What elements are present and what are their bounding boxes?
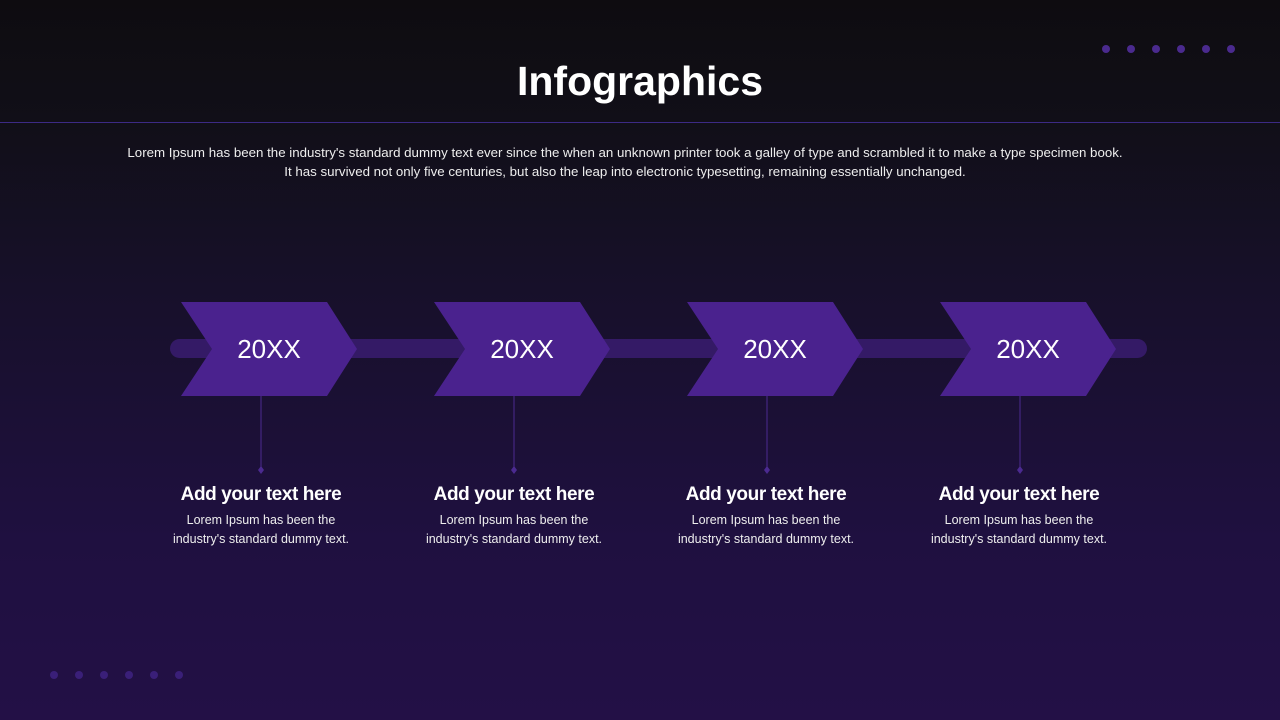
decorative dots top right — [1102, 45, 1235, 53]
decorative dots bottom left — [50, 671, 183, 679]
step 2 chevron — [434, 302, 610, 396]
title: Infographics — [517, 58, 763, 104]
text block 3: Add your text here — [686, 484, 846, 505]
text block 1: Lorem Ipsum has been the — [187, 513, 335, 527]
step 3 chevron: 20XX — [743, 334, 807, 364]
text block 2: industry's standard dummy text. — [426, 532, 602, 546]
intro text: Lorem Ipsum has been the industry's standard dummy text ever since the when an unknown printer took a galley of type and scrambled it to make a type specimen book. — [127, 145, 1123, 160]
text block 2: Add your text here — [434, 484, 594, 505]
text block 1 — [173, 484, 349, 546]
step 4 chevron — [940, 302, 1116, 396]
step 2 chevron: 20XX — [490, 334, 554, 364]
text block 4: industry's standard dummy text. — [931, 532, 1107, 546]
text block 1: industry's standard dummy text. — [173, 532, 349, 546]
text block 1: Add your text here — [181, 484, 341, 505]
intro text — [127, 145, 1123, 179]
step 1 chevron: 20XX — [237, 334, 301, 364]
step 3 chevron — [687, 302, 863, 396]
text block 3: Lorem Ipsum has been the — [692, 513, 840, 527]
text block 4: Lorem Ipsum has been the — [945, 513, 1093, 527]
text block 2 — [426, 484, 602, 546]
text block 2: Lorem Ipsum has been the — [440, 513, 588, 527]
intro text: It has survived not only five centuries, but also the leap into electronic typesetting, remaining essentially unchanged. — [284, 164, 966, 179]
step 4 chevron: 20XX — [996, 334, 1060, 364]
text block 4 — [931, 484, 1107, 546]
text block 3 — [678, 484, 854, 546]
step 1 chevron — [181, 302, 357, 396]
text block 3: industry's standard dummy text. — [678, 532, 854, 546]
text block 4: Add your text here — [939, 484, 1099, 505]
